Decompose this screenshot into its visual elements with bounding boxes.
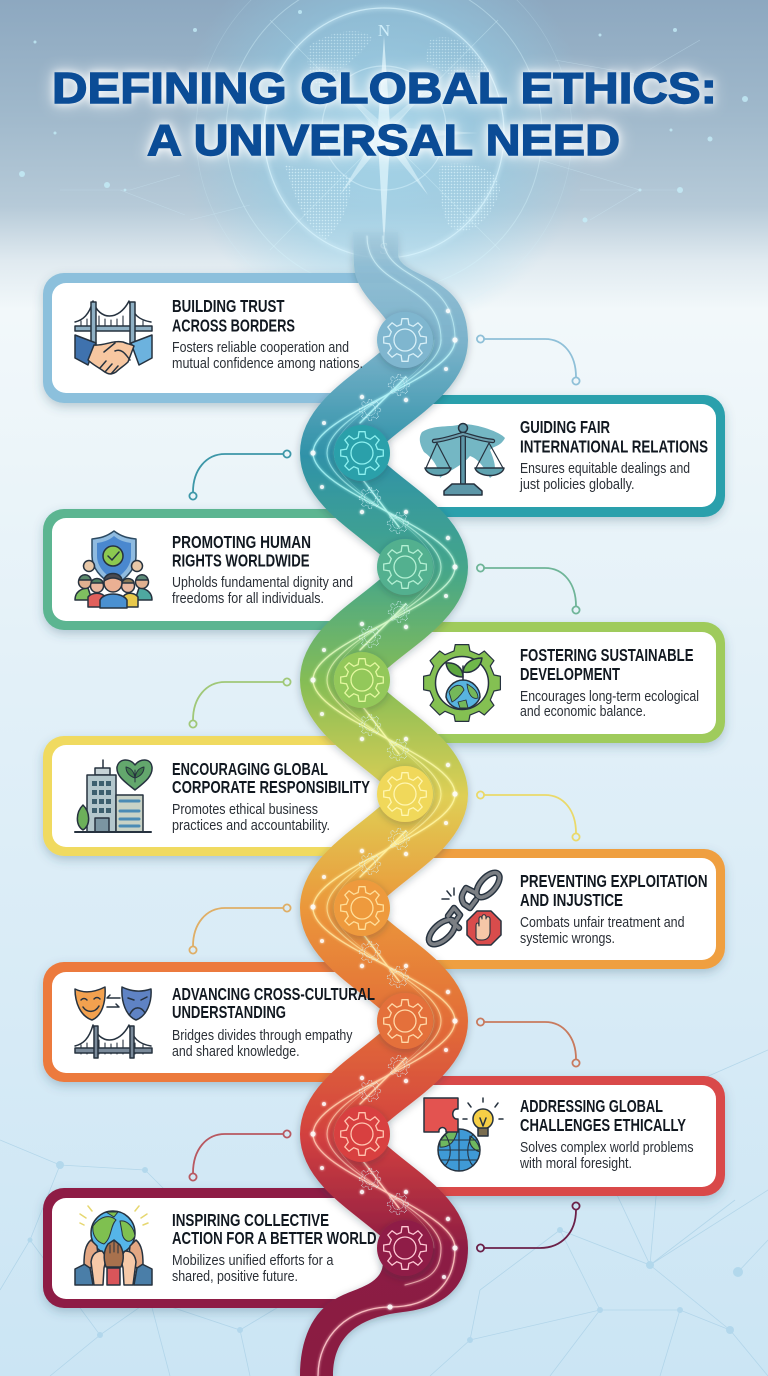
connector 7 [477,1018,580,1067]
panel text: corporate responsibility: ENCOURAGING GLOBAL [172,759,328,779]
icon: hands lifting earth [75,1206,152,1285]
ribbon glowing nodes [310,309,458,1310]
panel text: collective action [172,1210,376,1285]
panel text: exploitation: AND INJUSTICE [520,890,623,910]
connector 8 [189,1130,291,1181]
panel text: building trust: ACROSS BORDERS [172,316,295,336]
title: DEFINING GLOBAL ETHICS: [52,64,717,113]
panel text: sustainable development: DEVELOPMENT [520,664,620,684]
globe and compass emblem: S [379,239,389,258]
icon: puzzle globe and light bulb [424,1098,503,1171]
panel text: cross-cultural: ADVANCING CROSS-CULTURAL [172,984,375,1004]
title: A UNIVERSAL NEED [147,116,620,165]
connector 4 [189,678,291,728]
panel text: fair relations: INTERNATIONAL RELATIONS [520,436,708,456]
panel text: exploitation: PREVENTING EXPLOITATION [520,871,708,891]
panel text: corporate responsibility: practices and accountability. [172,818,330,834]
icon: broken chain and stop hand [425,869,504,949]
globe and compass emblem: N [378,21,390,40]
panel text: cross-cultural [172,984,375,1060]
connector 1 [477,335,580,385]
globe and compass emblem [19,0,748,321]
panel text: fair relations: Ensures equitable dealings and [520,461,690,477]
small link gears [359,374,410,1215]
icon: shield and people [75,531,152,608]
panel text: sustainable development: FOSTERING SUSTAINABLE [520,645,694,665]
panel text: human rights: freedoms for all individuals. [172,591,324,607]
icon: corporate building and heart [75,760,152,832]
connector 9 [477,1202,580,1252]
panel text: global challenges [519,1096,694,1172]
panel text: collective action: ACTION FOR A BETTER WORLD [172,1228,376,1248]
panel text: cross-cultural: UNDERSTANDING [172,1002,286,1022]
panel text: human rights: Upholds fundamental dignity and [172,575,353,591]
panel text: exploitation [520,871,708,947]
panel text: exploitation: systemic wrongs. [520,931,615,947]
connector 2 [189,450,291,500]
icon: sustainability gear [424,645,500,721]
panel backgrounds [43,273,725,1308]
panel text: human rights: RIGHTS WORLDWIDE [172,551,310,571]
icon: justice scales and map [420,424,505,495]
panel text: corporate responsibility [172,759,370,834]
panel text: sustainable development: Encourages long-term ecological [520,689,699,705]
panel text: sustainable development: and economic balance. [520,704,646,720]
panel text: fair relations: GUIDING FAIR [520,417,610,437]
panel text: collective action: Mobilizes unified efforts for a [172,1253,334,1269]
panel text: human rights [172,532,353,607]
connector 3 [477,564,580,614]
panel text: fair relations [519,417,708,493]
panel text: global challenges: Solves complex world problems [520,1140,694,1156]
icon: bridge and handshake [75,301,152,374]
gear nodes [334,312,433,1276]
panel text: building trust: Fosters reliable cooperation and [172,340,349,356]
panel text: global challenges: with moral foresight. [519,1156,632,1172]
panel text: global challenges: ADDRESSING GLOBAL [520,1096,663,1116]
background network pattern [0,1050,768,1376]
ribbon glowing circuit lines [313,236,455,1376]
panel text: collective action: shared, positive future. [172,1269,298,1285]
panel text: sustainable development [520,645,699,720]
connector 5 [477,791,580,841]
icon: masks and bridge [75,987,152,1058]
panel text: fair relations: just policies globally. [519,477,634,493]
panel text: cross-cultural: and shared knowledge. [172,1044,300,1060]
panel text: corporate responsibility: Promotes ethical business [172,802,318,818]
panel text: global challenges: CHALLENGES ETHICALLY [520,1115,686,1135]
panel text: collective action: INSPIRING COLLECTIVE [172,1210,329,1230]
title [52,64,717,165]
panel text: building trust: BUILDING TRUST [172,296,285,316]
winding ribbon path [300,232,468,1376]
panel text: human rights: PROMOTING HUMAN [172,532,311,552]
panel text: exploitation: Combats unfair treatment and [520,915,684,931]
panel text: building trust: mutual confidence among nations. [172,356,363,372]
panel text: cross-cultural: Bridges divides through empathy [172,1028,353,1044]
panel text: building trust [172,296,363,372]
connector 6 [189,904,291,954]
panel text: corporate responsibility: CORPORATE RESPONSIBILITY [172,777,370,797]
